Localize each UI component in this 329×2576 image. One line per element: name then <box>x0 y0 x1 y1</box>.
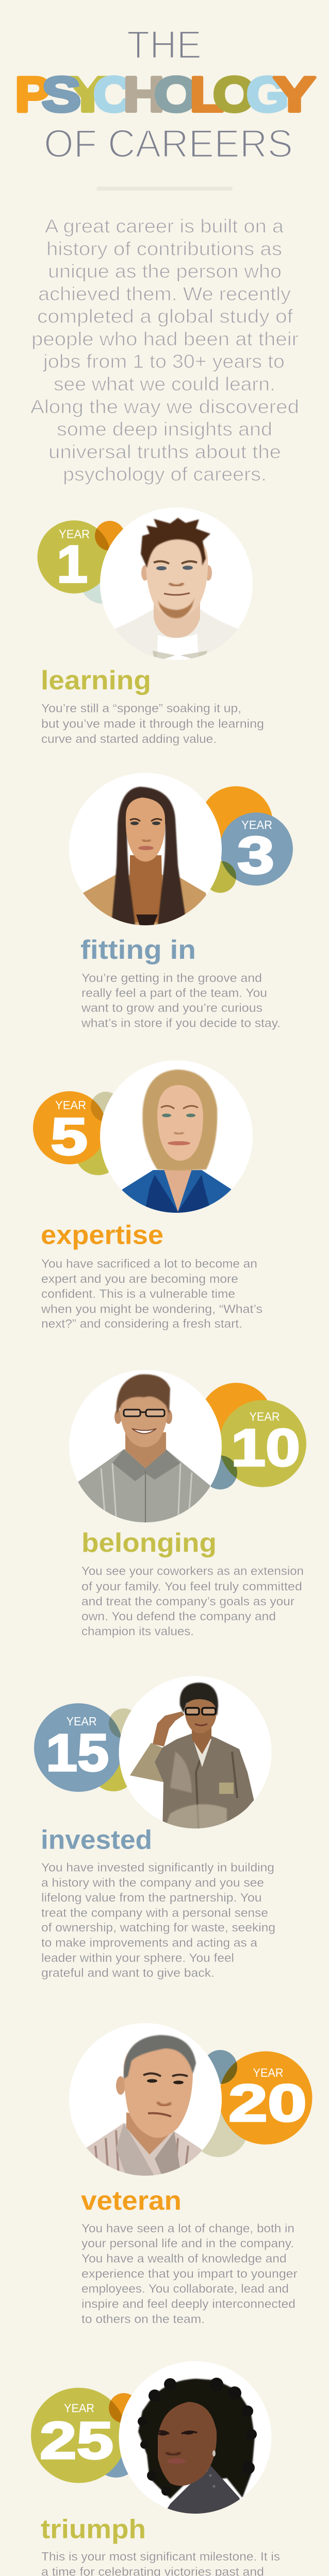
year badge: year 20: 20 <box>228 2074 307 2132</box>
text: invested description: You have invested significantly in building <box>41 1861 274 1874</box>
panel: year 1 learning <box>37 507 264 745</box>
year badge: year 3 <box>200 786 293 893</box>
text: veteran description: your personal life and in the company. <box>81 2236 294 2250</box>
title word: PSYCHOLOGY: H <box>123 67 164 122</box>
year badge: year 3: 3 <box>237 826 274 885</box>
text: veteran description: You have seen a lot of change, both in <box>81 2222 294 2235</box>
portrait: woman with long dark hair <box>69 773 222 927</box>
text: fitting in description: what’s in store if you decide to stay. <box>81 1016 281 1030</box>
year badge: year 15 <box>34 1703 139 1792</box>
text: invested description: to make improvements and acting as a <box>41 1936 257 1950</box>
panel: year 10 belonging <box>69 1370 306 1638</box>
intro paragraph: achieved them. We recently <box>38 283 291 304</box>
text: expertise description: expert and you are becoming more <box>41 1272 238 1285</box>
portrait: grey-haired man in striped shirt <box>69 2023 222 2179</box>
year badge: year 25: YEAR <box>64 2401 94 2415</box>
intro paragraph: universal truths about the <box>48 441 281 462</box>
year badge: year 15: YEAR <box>67 1715 97 1728</box>
text: learning description <box>41 702 264 745</box>
intro paragraph: psychology of careers. <box>63 464 267 485</box>
text: veteran description: experience that you impart to younger <box>81 2267 298 2280</box>
year badge: year 25: 25 <box>40 2411 113 2470</box>
text: veteran description: inspire and feel deeply interconnected <box>81 2297 295 2311</box>
title word: PSYCHOLOGY: G <box>246 67 289 122</box>
title word: PSYCHOLOGY: C <box>93 67 133 122</box>
portrait: woman with dark curly hair <box>119 2361 271 2519</box>
text: expertise description: confident. This is a vulnerable time <box>41 1287 235 1300</box>
text: veteran description: employees. You collaborate, lead and <box>81 2282 289 2295</box>
text: invested description: lifelong value from the partnership. You <box>41 1891 262 1904</box>
text: triumph description: This is your most significant milestone. It is <box>41 2550 280 2563</box>
panel: year 15 invested <box>34 1676 275 1979</box>
text: belonging description <box>81 1564 304 1638</box>
text: triumph description <box>41 2550 280 2576</box>
title <box>15 23 316 166</box>
panel: year 5 expertise <box>33 1060 262 1330</box>
text: expertise description: when you might be wondering, “What’s <box>41 1302 262 1316</box>
text: invested description: a history with the company and you see <box>41 1876 264 1889</box>
year badge: year 5: YEAR <box>55 1098 86 1112</box>
portrait: woman adjusting glasses in bronze jacket <box>119 1676 271 1834</box>
year badge: year 5 <box>33 1091 121 1175</box>
text: belonging description: and treat the company’s goals as your <box>81 1595 294 1608</box>
text: belonging description: champion its values. <box>81 1624 194 1638</box>
intro paragraph: history of contributions as <box>46 238 282 259</box>
year badge: year 1: YEAR <box>59 528 90 541</box>
intro paragraph: some deep insights and <box>57 419 272 440</box>
text: learning description: but you’ve made it through the learning <box>41 717 264 730</box>
year badge: year 1: 1 <box>57 535 88 594</box>
year badge: year 10: YEAR <box>250 1410 279 1423</box>
text: fitting in description: really feel a part of the team. You <box>81 986 267 999</box>
panel: year 20 veteran <box>69 2023 312 2326</box>
text: veteran description: You have a wealth of knowledge and <box>81 2252 287 2265</box>
text: fitting in description <box>81 971 281 1030</box>
year badge: year 1 <box>37 520 126 604</box>
intro paragraph: Along the way we discovered <box>30 396 299 417</box>
intro paragraph: completed a global study of <box>37 306 293 327</box>
year badge: year 25 <box>31 2387 139 2483</box>
title word: PSYCHOLOGY: O <box>154 67 199 122</box>
text: belonging description: of your family. You feel truly committed <box>81 1580 302 1593</box>
text: veteran description: to others on the team. <box>81 2312 205 2326</box>
heading: veteran: veteran <box>81 2186 182 2216</box>
heading: invested: invested <box>41 1825 152 1855</box>
portrait: smiling man with glasses <box>69 1370 222 1525</box>
text: invested description <box>41 1861 275 1979</box>
title word: PSYCHOLOGY: L <box>190 67 224 122</box>
heading: expertise: expertise <box>41 1220 163 1250</box>
title word: PSYCHOLOGY: Y <box>273 67 316 122</box>
intro paragraph <box>30 215 299 485</box>
title word: PSYCHOLOGY: O <box>213 67 256 122</box>
text: invested description: grateful and want to give back. <box>41 1966 215 1979</box>
panel: year 3 fitting in <box>69 773 293 1030</box>
year badge: year 10: 10 <box>231 1418 300 1477</box>
intro paragraph: jobs from 1 to 30+ years to <box>43 351 285 372</box>
title line: THE: THE <box>127 23 202 67</box>
heading: learning: learning <box>41 666 151 696</box>
year badge: year 20: YEAR <box>253 2066 284 2079</box>
text: invested description: treat the company with a personal sense <box>41 1906 268 1920</box>
text: veteran description <box>81 2222 298 2326</box>
title word: PSYCHOLOGY: Y <box>66 67 109 122</box>
year badge: year 10 <box>200 1383 306 1489</box>
text: fitting in description: You’re getting in the groove and <box>81 971 262 985</box>
year badge: year 15: 15 <box>46 1723 109 1782</box>
intro paragraph: see what we could learn. <box>54 374 275 395</box>
year badge: year 3: YEAR <box>241 818 272 832</box>
panel: year 25 triumph <box>31 2361 280 2576</box>
portrait: blonde woman in blue shirt <box>100 1060 253 1216</box>
text: fitting in description: want to grow and you’re curious <box>81 1001 262 1014</box>
title word: PSYCHOLOGY: P <box>15 67 51 122</box>
text: expertise description: You have sacrificed a lot to become an <box>41 1257 257 1270</box>
text: expertise description: next?” and considering a fresh start. <box>41 1317 242 1330</box>
year badge: year 5: 5 <box>51 1107 88 1166</box>
text: learning description: You’re still a “sponge” soaking it up, <box>41 702 241 715</box>
intro paragraph: people who had been at their <box>31 328 299 349</box>
title word: PSYCHOLOGY <box>15 67 316 122</box>
text: belonging description: You see your coworkers as an extension <box>81 1564 304 1578</box>
text: expertise description <box>41 1257 262 1330</box>
title word: PSYCHOLOGY: S <box>42 67 81 122</box>
text: belonging description: own. You defend the company and <box>81 1609 276 1623</box>
text: invested description: leader within your sphere. You feel <box>41 1951 234 1964</box>
text: learning description: curve and started adding value. <box>41 732 217 745</box>
heading: belonging: belonging <box>81 1528 217 1558</box>
heading: fitting in: fitting in <box>80 935 196 965</box>
portrait: young man with goatee <box>100 507 253 665</box>
year badge: year 20 <box>190 2050 312 2157</box>
intro paragraph: unique as the person who <box>48 261 282 282</box>
text: invested description: of ownership, watching for waste, seeking <box>41 1921 275 1934</box>
intro paragraph: A great career is built on a <box>45 215 284 237</box>
heading: triumph: triumph <box>41 2515 146 2545</box>
title line: OF CAREERS: OF CAREERS <box>44 122 293 166</box>
